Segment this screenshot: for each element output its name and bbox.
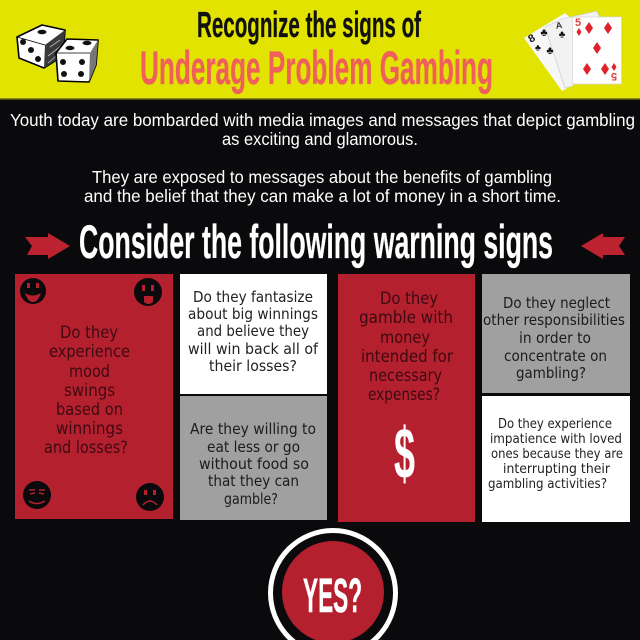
header band bbox=[0, 0, 640, 100]
panel: fantasize about winnings: about big winnings bbox=[188, 305, 318, 323]
icon: playing cards: A bbox=[555, 20, 563, 31]
intro text: They are exposed to messages about the benefits of gambling bbox=[92, 167, 552, 187]
intro text: as exciting and glamorous. bbox=[222, 129, 418, 149]
panel: mood swings: swings bbox=[64, 381, 115, 401]
panel: fantasize about winnings: and believe they bbox=[197, 322, 309, 340]
panel: necessary expenses: necessary bbox=[369, 366, 442, 386]
panel: impatience with loved ones: interrupting their bbox=[503, 461, 610, 477]
panel: eat less bbox=[180, 396, 327, 520]
icon: playing cards: ♣ bbox=[559, 30, 566, 41]
icon: playing cards: 5 bbox=[611, 70, 617, 82]
intro text bbox=[10, 110, 635, 206]
panel: fantasize about winnings: will win back all of bbox=[188, 340, 319, 358]
panel: eat less: gamble? bbox=[224, 490, 278, 508]
icon: smirking face bbox=[23, 481, 51, 509]
panel: mood swings: mood bbox=[69, 362, 110, 382]
title bbox=[140, 4, 493, 94]
panel: necessary expenses: Do they bbox=[380, 289, 438, 309]
intro text: Youth today are bombarded with media images and messages that depict gambling bbox=[10, 110, 635, 130]
panel: fantasize about winnings: their losses? bbox=[209, 357, 297, 375]
panel: necessary expenses: money bbox=[380, 328, 430, 348]
panel: impatience with loved ones: Do they experience bbox=[498, 416, 612, 432]
panel: fantasize about winnings: Do they fantasize bbox=[193, 288, 313, 306]
panel: necessary expenses: intended for bbox=[361, 347, 453, 367]
panel: neglect responsibilities: concentrate on bbox=[504, 347, 607, 365]
icon: playing cards: ♣ bbox=[535, 42, 541, 52]
callout: yes bbox=[270, 530, 396, 640]
panel: neglect responsibilities: other responsibilities bbox=[483, 311, 625, 329]
panel: eat less: Are they willing to bbox=[190, 420, 316, 438]
panel: neglect responsibilities: Do they neglect bbox=[503, 294, 610, 312]
panel: impatience with loved ones: ones because they are bbox=[491, 446, 623, 462]
title: Recognize the signs of bbox=[197, 4, 422, 45]
panel: necessary expenses bbox=[338, 274, 475, 522]
icon: tongue face bbox=[134, 278, 162, 306]
icon: playing cards: 8 bbox=[526, 32, 538, 46]
panel: necessary expenses: expenses? bbox=[368, 385, 440, 405]
panel: impatience with loved ones bbox=[482, 396, 630, 522]
icon: playing cards bbox=[524, 11, 622, 91]
panel: eat less: that they can bbox=[208, 472, 299, 490]
panel: neglect responsibilities bbox=[482, 274, 630, 393]
panel: mood swings: based on bbox=[56, 400, 123, 420]
icon: playing cards: ♣ bbox=[540, 27, 548, 39]
icon: playing cards: ♣ bbox=[546, 45, 554, 57]
panel: necessary expenses: gamble with bbox=[359, 308, 453, 328]
icon: grinning face bbox=[20, 278, 46, 304]
arrow: left bbox=[25, 233, 70, 259]
panel: mood swings: and losses? bbox=[44, 438, 128, 458]
panel: eat less: without food so bbox=[199, 455, 309, 473]
panel: eat less: eat less or go bbox=[207, 438, 300, 456]
panel: fantasize about winnings bbox=[180, 274, 327, 394]
panel: impatience with loved ones: impatience with loved bbox=[490, 431, 622, 447]
panel: neglect responsibilities: in order to bbox=[519, 329, 591, 347]
intro text: and the belief that they can make a lot of money in a short time. bbox=[84, 186, 561, 206]
panel: mood swings: Do they bbox=[60, 323, 118, 343]
panel: neglect responsibilities: gambling? bbox=[516, 364, 586, 382]
panel: impatience with loved ones: gambling activities? bbox=[488, 476, 607, 492]
icon: playing cards: 5 bbox=[575, 17, 581, 29]
icon: dice bbox=[17, 25, 98, 82]
icon: dollar sign: $ bbox=[394, 414, 415, 494]
panel: mood swings: experience bbox=[49, 342, 130, 362]
arrow: right bbox=[581, 233, 625, 259]
callout: yes: YES? bbox=[303, 570, 362, 623]
panel: mood swings bbox=[15, 274, 173, 519]
icon: sad face bbox=[136, 483, 164, 511]
panel: mood swings: winnings bbox=[56, 419, 123, 439]
